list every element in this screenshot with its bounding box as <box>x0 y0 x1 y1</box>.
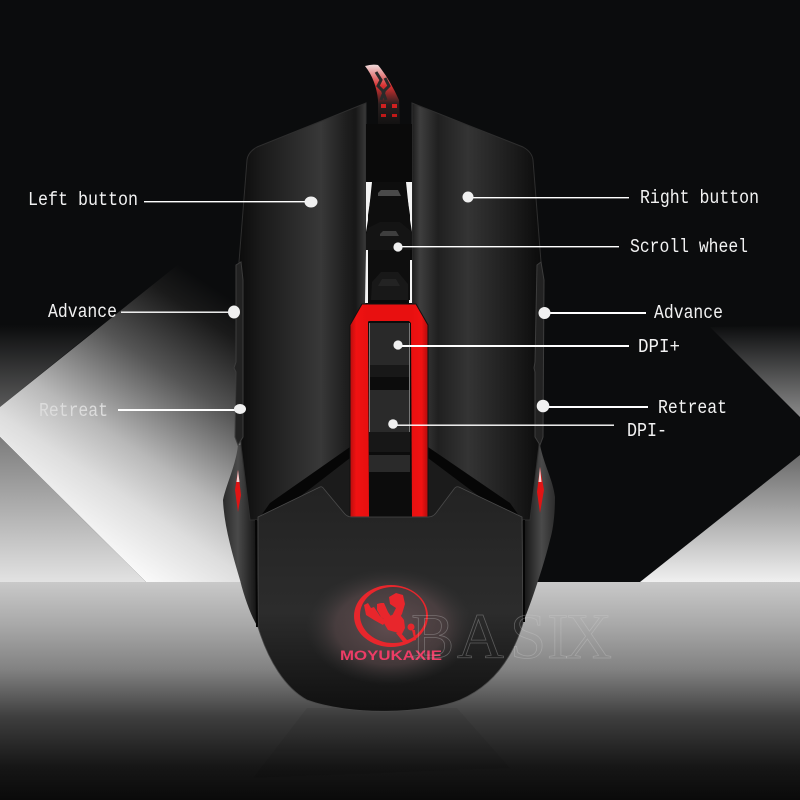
side wing right <box>518 445 555 625</box>
label: Advance right <box>538 302 723 324</box>
scroll wheel <box>365 182 412 303</box>
label: Retreat right: Retreat <box>658 397 727 419</box>
label: Right button <box>462 187 759 209</box>
label: DPI+ <box>393 336 680 358</box>
label: Left button: Left button <box>28 189 138 211</box>
label: Advance left: Advance <box>48 301 117 323</box>
mouse reflection <box>253 708 510 778</box>
cable <box>365 65 400 125</box>
DPI buttons <box>368 321 412 517</box>
left mouse button and body <box>239 103 366 520</box>
watermark: BASIX <box>411 601 612 673</box>
label: Retreat left: Retreat <box>39 400 108 422</box>
side buttons right <box>534 262 544 445</box>
palm shell <box>258 487 523 711</box>
side wing left <box>223 445 262 627</box>
label: Right button: Right button <box>640 187 759 209</box>
side buttons left <box>234 262 243 445</box>
label: Scroll wheel: Scroll wheel <box>630 236 748 258</box>
side LED right <box>537 467 544 513</box>
center channel <box>366 124 412 314</box>
side LED left <box>235 470 241 512</box>
label: DPI-: DPI- <box>627 420 667 442</box>
label: DPI- <box>388 419 667 442</box>
right light beam <box>640 325 800 582</box>
red frame <box>350 304 428 517</box>
left light beam <box>0 263 300 582</box>
label: Scroll wheel <box>393 236 748 258</box>
label: DPI+: DPI+ <box>638 336 680 358</box>
right mouse button and body <box>412 103 541 520</box>
shell side shadows <box>256 520 524 627</box>
logo: scorpion emblem <box>354 585 428 647</box>
logo wordmark: MOYUKAXIE <box>340 647 442 663</box>
label: Left button <box>28 189 318 211</box>
logo glow <box>306 569 474 685</box>
label: Advance right: Advance <box>654 302 723 324</box>
mouse <box>223 65 555 711</box>
wedge shadows <box>258 447 522 520</box>
floor <box>0 582 800 800</box>
label: Retreat right <box>537 397 727 419</box>
label: Advance left <box>48 301 240 323</box>
label: Retreat left <box>39 400 246 422</box>
